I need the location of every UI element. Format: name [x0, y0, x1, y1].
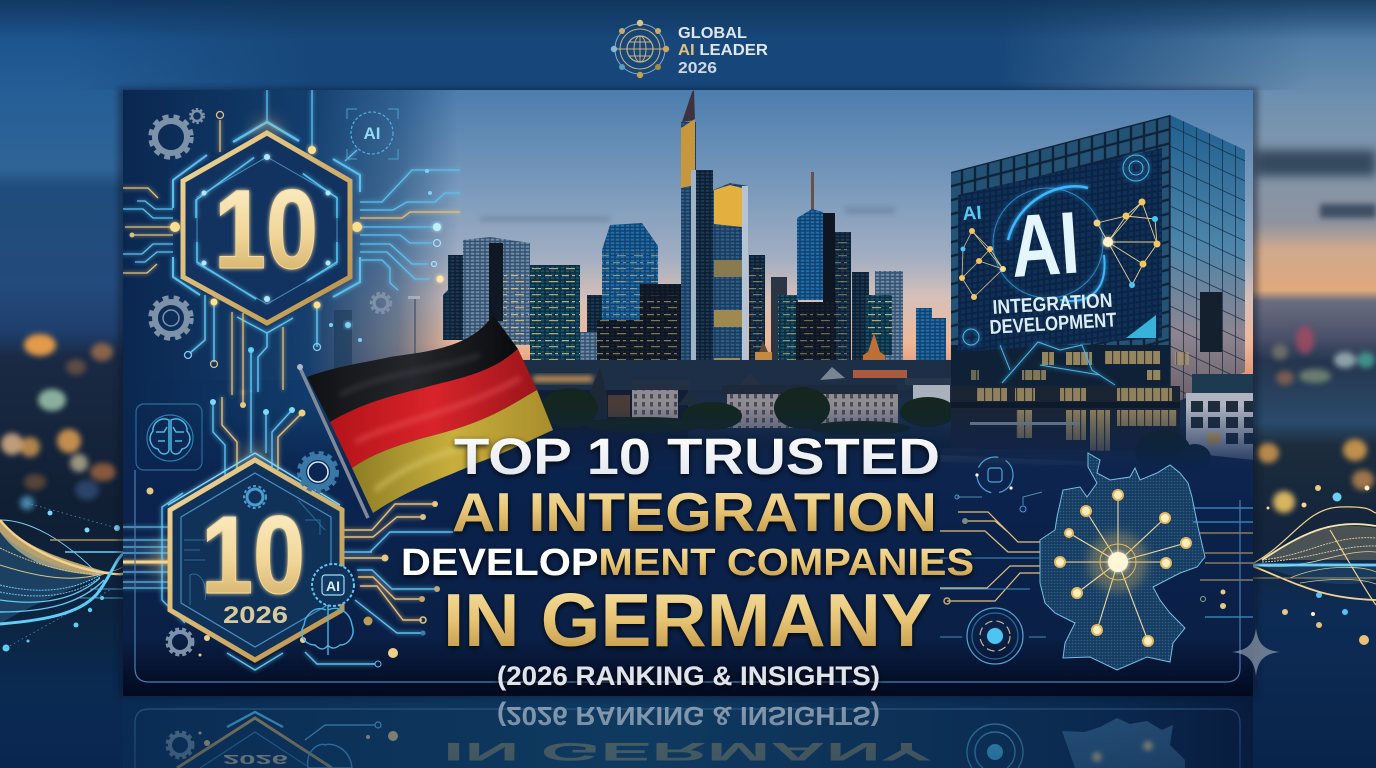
- map outline: [1040, 453, 1205, 670]
- AI emblem top right of badge: [347, 109, 398, 159]
- panel shadow: [118, 88, 1258, 698]
- Frankfurt skyline: [443, 90, 946, 385]
- reflection band below the panel: [123, 696, 1253, 768]
- gear large top: [150, 116, 192, 158]
- sparkle icon: [1232, 628, 1280, 676]
- logo emblem: [611, 20, 669, 78]
- lower badge nodes: [146, 399, 440, 667]
- central twin tower: [682, 90, 695, 122]
- gear on lower badge corner: [299, 453, 337, 491]
- dusk sky: [311, 90, 1253, 375]
- logo text: [678, 25, 768, 77]
- blue chamfered tower: [602, 223, 658, 330]
- reflected trace: [305, 722, 381, 740]
- neighbouring white building: [1186, 374, 1256, 490]
- black stripe: [307, 315, 518, 422]
- lit floors: [971, 351, 1189, 380]
- faded circuit head: [184, 500, 325, 605]
- trace end nodes: [130, 112, 444, 368]
- bottom navy fade: [123, 405, 1253, 696]
- AI emblem top right of badge: AI: [364, 124, 380, 143]
- chip icon: [975, 457, 1013, 493]
- lower number badge: [168, 453, 342, 660]
- logo text: 2026: [678, 60, 717, 77]
- flag pole: [300, 368, 368, 518]
- right network: [1094, 198, 1160, 288]
- number ten: 10: [214, 167, 318, 292]
- circuit traces around lower badge: [120, 390, 453, 670]
- circuit traces around top badge: [123, 90, 460, 392]
- lower city blocks: [445, 360, 956, 435]
- AI chip and brain: [302, 564, 354, 655]
- reflected year: 2026: [223, 752, 288, 767]
- gear small right: [371, 293, 391, 313]
- title line two: AI INTEGRATION: [452, 481, 937, 543]
- lobby: [951, 386, 1180, 454]
- small background sparkle dots: [2, 485, 1370, 652]
- big AI sign: AI: [1007, 192, 1082, 296]
- network nodes: [1055, 490, 1191, 646]
- street and trees: [940, 448, 1253, 500]
- german flag on pole: [297, 315, 553, 518]
- brain tile: [136, 404, 202, 470]
- logo text: GLOBAL: [678, 25, 747, 42]
- inner gear: [244, 486, 266, 508]
- reflected radar: [967, 724, 1023, 768]
- reflected inner hexagon: [200, 732, 310, 768]
- flag highlights: [340, 355, 520, 490]
- reflected hexagon: [177, 718, 332, 768]
- integration development sign: DEVELOPMENT: [989, 309, 1117, 339]
- title line three: DEVELOP MENT COMPANIES: [401, 542, 974, 584]
- AI chip and brain: AI: [326, 578, 340, 594]
- reflected frame: [135, 709, 1240, 768]
- badge glow: [150, 119, 281, 580]
- brain outline: [302, 605, 353, 655]
- map traces: [940, 492, 1255, 637]
- building front face: [951, 115, 1170, 345]
- integration development sign: INTEGRATION: [992, 290, 1113, 319]
- glowing globe: [993, 186, 1105, 301]
- reflected brain: [308, 744, 352, 768]
- year: 2026: [223, 602, 288, 629]
- gear large lower: [150, 298, 192, 338]
- reflection contents: [135, 701, 1240, 768]
- gear bottom: [167, 629, 193, 655]
- small AI sign: AI: [962, 203, 982, 225]
- left network: [959, 228, 1006, 300]
- integration development sign: [989, 290, 1117, 339]
- glass office building: [940, 115, 1256, 500]
- left group: [443, 255, 463, 340]
- gear small top: [190, 109, 204, 123]
- reflected subtitle: (2026 RANKING & INSIGHTS): [497, 701, 880, 731]
- building right face: [1170, 115, 1245, 405]
- map side nodes: [944, 495, 1226, 609]
- reflected cyan chevron: [227, 712, 283, 727]
- radar icon: [967, 608, 1023, 664]
- number ten: 10: [201, 494, 305, 617]
- gold traces around top badge: [123, 120, 460, 395]
- navy tech backdrop: [123, 90, 454, 466]
- title block: [401, 428, 974, 691]
- reflected dots: [198, 731, 398, 746]
- central hub: [1088, 532, 1148, 592]
- right data wave: [1250, 507, 1376, 605]
- inner frame: [135, 470, 1240, 682]
- gold stripe: [352, 390, 553, 513]
- main image panel: [120, 90, 1256, 696]
- facade circuit graphics: [963, 155, 1149, 385]
- reflected gear: [167, 732, 193, 758]
- brain icon: [150, 419, 190, 454]
- red stripe: [330, 349, 537, 468]
- reflected title line: IN GERMANY: [443, 738, 932, 766]
- faint clouds: [480, 208, 895, 221]
- left data wave: [0, 503, 126, 648]
- gear icons: [150, 109, 391, 655]
- bar chart sign: [1126, 315, 1156, 338]
- corner lights: [202, 154, 330, 302]
- AI screen: [958, 148, 1162, 352]
- germany map with network: [940, 453, 1255, 670]
- logo text: AI LEADER: [678, 42, 768, 59]
- subtitle: (2026 RANKING & INSIGHTS): [497, 661, 880, 691]
- title line one: TOP 10 TRUSTED: [454, 428, 940, 485]
- network spokes: [1060, 495, 1186, 641]
- inner cyan lines: [197, 157, 337, 304]
- reflected map nodes: [1092, 741, 1153, 762]
- church tower: [863, 333, 885, 360]
- tree clusters: [542, 387, 956, 435]
- top number badge: [183, 133, 350, 323]
- right cluster: [771, 277, 787, 368]
- dim towers behind tech panel: [334, 296, 420, 370]
- logo: Global AI Leader 2026: [611, 20, 768, 78]
- bokeh lights: [1, 326, 1375, 513]
- reflected germany map: [1062, 718, 1185, 768]
- title line four: IN GERMANY: [443, 578, 932, 662]
